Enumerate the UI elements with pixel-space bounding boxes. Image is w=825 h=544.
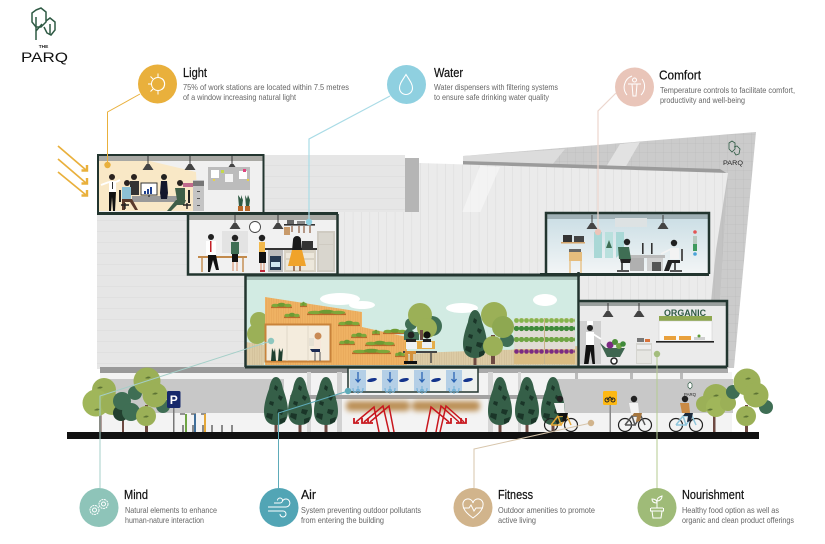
callout: Comfort: productivity and well-being — [660, 95, 745, 105]
PARQ street mark — [684, 382, 696, 397]
street level structure — [100, 367, 733, 432]
logo: The PARQ — [21, 8, 68, 65]
lamps — [230, 215, 284, 229]
callout: Mind: Natural elements to enhance — [125, 505, 217, 515]
callout: Fitness: active living — [498, 515, 536, 525]
background bush — [247, 312, 268, 344]
meeting people — [101, 174, 191, 211]
callout: Mind: human-nature interaction — [125, 515, 204, 525]
fence and hill — [246, 342, 578, 365]
poplar trees right — [488, 377, 565, 432]
leader line: comfort — [595, 93, 616, 235]
icon: water drop — [387, 65, 426, 104]
room outlines — [97, 155, 727, 367]
panel: organic food room — [579, 302, 726, 366]
panel: rooftop garden — [246, 276, 578, 367]
air conditioner — [615, 218, 647, 227]
cyclist white shirt — [618, 396, 652, 432]
kitchen shelf and utensils — [284, 220, 315, 235]
two office workers — [617, 239, 683, 271]
grey cabinet — [636, 338, 652, 364]
bicycle racks — [180, 414, 232, 432]
side cabinet — [569, 249, 582, 273]
leader line: fitness — [474, 420, 594, 488]
lamps — [602, 303, 644, 317]
poplar trees left — [264, 377, 338, 432]
panel: pantry room — [188, 214, 337, 274]
thermostat — [693, 230, 697, 256]
callout: Water: to ensure safe drinking water quality — [434, 92, 550, 102]
callout: Water — [387, 65, 558, 104]
parking sign — [167, 391, 180, 433]
icon: gears — [80, 488, 118, 527]
meeting table and monitor — [132, 183, 180, 202]
callout: Comfort — [615, 68, 795, 106]
callout: Nourishment: organic and clean product offerings — [682, 515, 794, 525]
callout: Nourishment — [638, 488, 794, 527]
wall pattern — [222, 231, 248, 253]
callout: Mind: Mind — [124, 488, 148, 502]
callout: Mind — [80, 488, 217, 527]
air filter box — [348, 368, 478, 394]
callout: Air: from entering the building — [301, 515, 384, 525]
garden tree — [481, 302, 514, 364]
desk and monitors — [630, 243, 665, 271]
logo: The PARQ: THE — [39, 44, 49, 50]
callout: Light: of a window increasing natural light — [183, 92, 297, 102]
callout: Fitness: Fitness — [498, 488, 533, 502]
callout: Nourishment: Healthy food option as well as — [682, 505, 779, 515]
blue fan units — [350, 370, 462, 391]
ground — [67, 432, 759, 439]
red pollution arrows — [354, 406, 466, 432]
fridge — [317, 231, 335, 272]
callout: Light: Light — [183, 66, 207, 80]
green wall planters — [271, 302, 407, 357]
callout: Air: System preventing outdoor pollutants — [301, 505, 421, 515]
callout: Light: 75% of work stations are located within 7.5 metres — [183, 82, 349, 92]
notice board — [208, 167, 250, 190]
filing cabinet — [183, 180, 204, 211]
standing table — [198, 256, 247, 272]
potted plants — [238, 195, 250, 211]
window with woman reading — [266, 324, 330, 362]
chef with wheelbarrow — [579, 321, 626, 364]
callout: Air: Air — [301, 488, 316, 502]
callout: Fitness: Outdoor amenities to promote — [498, 505, 595, 515]
callout: Fitness — [454, 488, 595, 527]
icon: sun — [138, 64, 177, 104]
leader line: water — [306, 96, 390, 225]
outdoor pollution haze — [346, 401, 480, 411]
water dispenser — [268, 250, 283, 272]
panel: light office room — [98, 155, 263, 213]
vegetable racks — [514, 318, 575, 364]
wooden house — [265, 297, 407, 365]
PARQ mark on facade: PARQ — [723, 161, 743, 167]
icon: potted plant — [638, 488, 676, 527]
parking sign: P — [170, 393, 178, 407]
callout: Comfort: Comfort — [659, 68, 701, 82]
callout: Nourishment: Nourishment — [682, 488, 744, 502]
clouds — [320, 293, 557, 313]
pantry people — [206, 234, 306, 272]
garden poplar — [463, 310, 487, 365]
callout: Water: Water — [434, 66, 463, 80]
lamps — [142, 156, 238, 170]
building: front facade — [97, 155, 728, 369]
street trees left — [82, 368, 170, 433]
icon: wind — [260, 488, 298, 527]
leader line: light — [104, 94, 140, 168]
windows — [594, 232, 624, 258]
shelf with bags — [561, 235, 585, 244]
lamps — [586, 215, 668, 229]
cyclist brown shirt — [670, 396, 702, 432]
leader line: mind — [100, 338, 274, 488]
sun rays arrows — [58, 146, 87, 196]
callout: Air — [260, 488, 421, 527]
street trees right — [696, 368, 773, 433]
leader line: nourishment — [654, 351, 660, 488]
icon: person in cycle — [615, 68, 654, 106]
leader line: air — [278, 388, 351, 488]
cyclist yellow bike — [544, 396, 578, 432]
logo: The PARQ: PARQ — [21, 49, 68, 65]
wall clock — [250, 222, 260, 232]
sunlight patch — [99, 161, 198, 211]
bicycle sign — [603, 391, 617, 433]
PARQ mark on facade — [723, 141, 743, 167]
building: back facade — [463, 132, 756, 368]
food display stall — [656, 316, 714, 343]
trees behind bench — [404, 303, 442, 340]
callout: Water: Water dispensers with filtering systems — [434, 82, 558, 92]
icon: heart pulse — [454, 488, 492, 527]
panel: comfort office room — [547, 214, 708, 273]
PARQ street mark: PARQ — [684, 392, 696, 397]
counter and microwave — [265, 241, 317, 272]
bench with two people — [403, 331, 437, 364]
callout: Comfort: Temperature controls to facilitate comfort, — [660, 85, 795, 95]
organic sign: ORGANIC — [664, 308, 706, 319]
callout: Light — [138, 64, 349, 104]
